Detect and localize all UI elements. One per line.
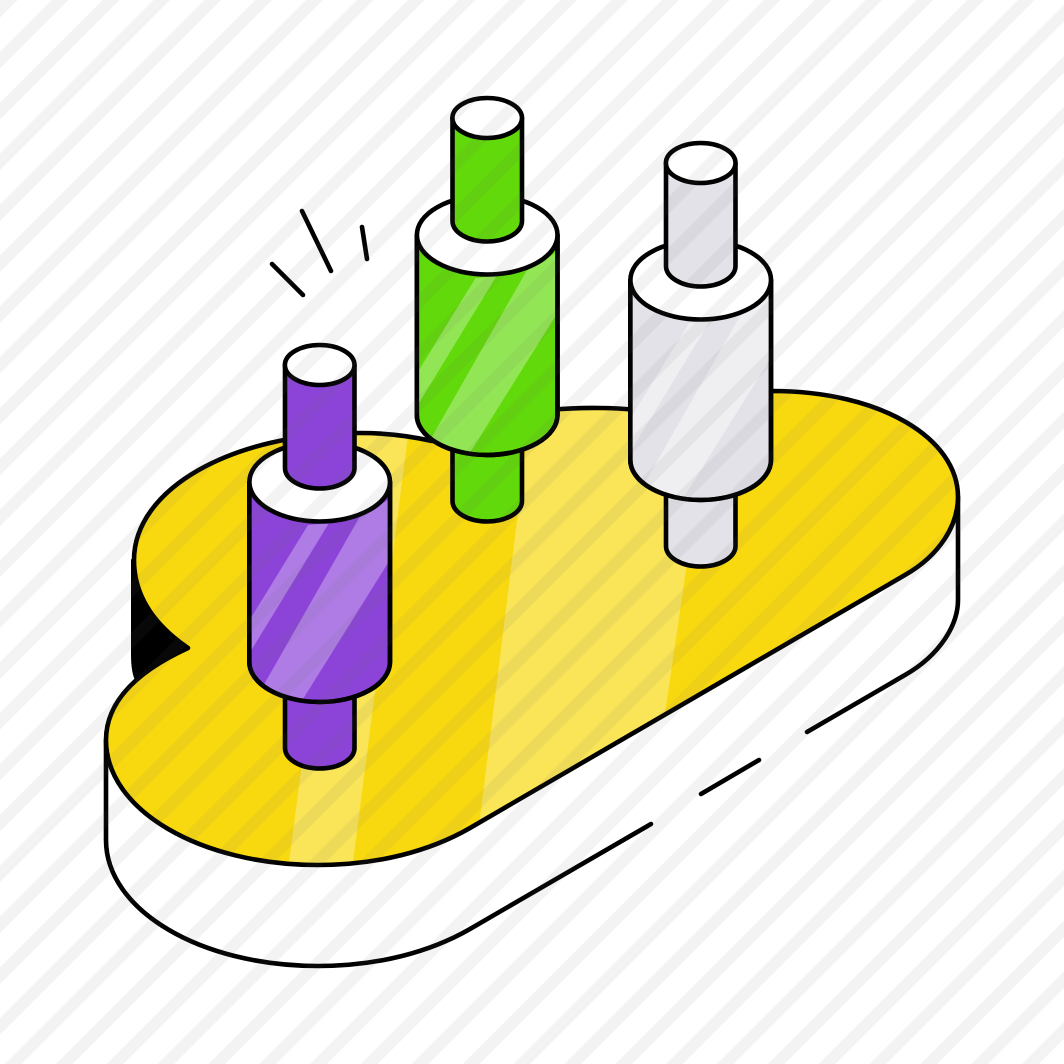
cloud platform bbox=[106, 380, 958, 966]
spark lines bbox=[272, 211, 367, 295]
cloud top outline bbox=[106, 391, 958, 865]
side wall outline: right edge bbox=[807, 497, 958, 732]
grey slider bbox=[630, 143, 771, 566]
side wall outline: middle dash bbox=[701, 760, 759, 794]
platform side wall bbox=[106, 497, 958, 966]
black inner wall at cloud notch bbox=[132, 560, 188, 682]
cloud top highlights bbox=[289, 410, 686, 863]
purple slider bbox=[249, 345, 390, 768]
side wall outline: left and bottom edge bbox=[106, 740, 651, 966]
yellow cloud top face bbox=[106, 391, 958, 865]
green slider bbox=[417, 98, 558, 522]
